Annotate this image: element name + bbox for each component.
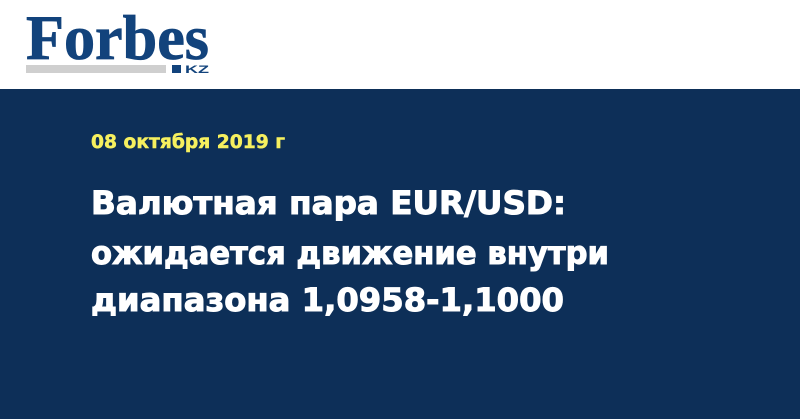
logo KZ label: KZ xyxy=(185,64,209,76)
logo: Forbes KZ xyxy=(26,2,209,76)
headline line 3: диапазона 1,0958-1,1000 xyxy=(91,281,564,319)
headline line 2: ожидается движение внутри xyxy=(91,234,609,272)
main navy panel xyxy=(0,89,800,419)
date: 08 октября 2019 г xyxy=(91,131,285,153)
logo blue square xyxy=(172,65,181,73)
headline line 1: Валютная пара EUR/USD: xyxy=(91,184,566,222)
headline xyxy=(91,184,609,319)
logo wordmark: Forbes xyxy=(26,2,209,73)
logo grey bar xyxy=(26,65,166,73)
header panel xyxy=(0,0,800,89)
